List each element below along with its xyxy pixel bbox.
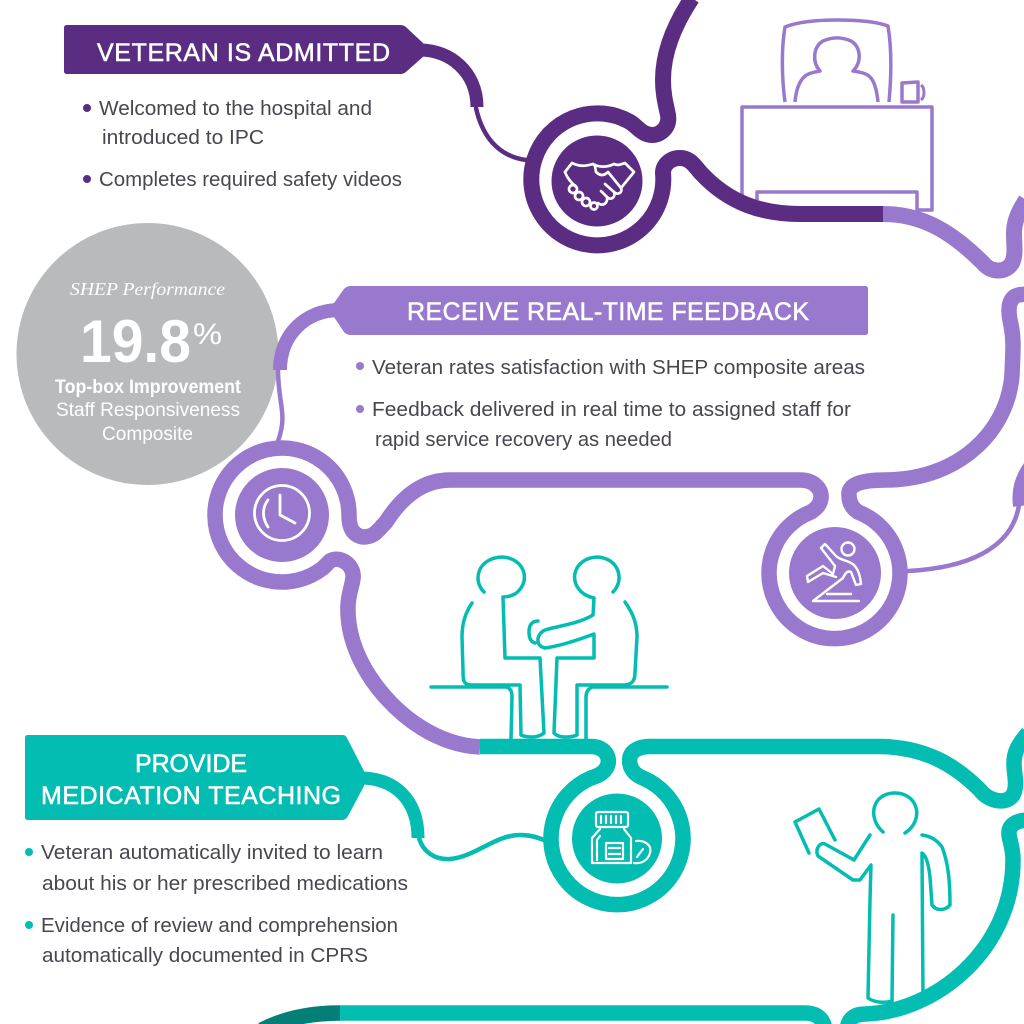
connector: thin line to medication ring [419,835,544,859]
text block: veteran admitted bullets: Welcomed to the hospital and [99,98,372,120]
icon: standing person with paper [795,793,950,1002]
connector: tail to right edge [1020,464,1024,506]
icon disk: handshake [552,136,642,226]
text block: veteran admitted bullets: introduced to IPC [102,127,264,149]
stat circle: SHEP performance: Composite [102,424,193,445]
text block: medication bullets: Evidence of review and comprehension [41,915,398,937]
stat circle: SHEP performance: SHEP Performance [70,279,225,299]
heading text: PROVIDE [135,750,247,778]
text block: feedback bullets: Veteran rates satisfaction with SHEP composite areas [372,357,865,379]
text block: medication bullets [25,842,408,967]
connector: thin line to clock ring [278,370,282,441]
text block: feedback bullets: rapid service recovery as needed [375,429,672,451]
icon: clock [254,486,310,540]
node: slip and fall ring [789,527,881,619]
stat circle: SHEP performance: Staff Responsiveness [56,400,240,421]
heading text: RECEIVE REAL-TIME FEEDBACK [407,298,809,326]
connector: bottom dark teal segment [262,1013,340,1024]
icon: person at desk [742,20,932,210]
stat circle: SHEP performance: % [193,318,222,351]
text block: veteran admitted bullets [83,98,402,191]
stat circle: SHEP performance [16,223,278,485]
connector: lower right teal path [847,820,1024,1024]
icon disk: clock [235,468,329,562]
heading tag: provide medication teaching [25,735,544,859]
icon: falling person [807,542,861,601]
stat circle: SHEP performance: 19.8 [80,308,191,375]
connector: middle path through clock and fall rings [215,294,1024,747]
text block: medication bullets: automatically documented in CPRS [42,945,368,967]
icon: medication bottle [592,812,650,863]
heading text: VETERAN IS ADMITTED [97,39,390,67]
icon disk: falling person [789,527,881,619]
connector: thin line from fall ring to right edge [908,464,1024,571]
connector: veteran admitted path (dark purple) [531,0,883,245]
icon: two people seated [431,557,667,739]
node: medication ring [572,794,662,884]
connector: teal path from purple junction through medication ring [480,733,1024,905]
text block: veteran admitted bullets: Completes required safety videos [99,169,402,191]
heading tag: receive real-time feedback [278,286,868,441]
icon disk: medication bottle [572,794,662,884]
text block: feedback bullets [356,357,865,451]
stat circle: SHEP performance: Top-box Improvement [55,377,242,398]
connector: upper light purple path [883,200,1024,271]
node: clock ring [235,468,329,562]
text block: medication bullets: Veteran automatically invited to learn [41,842,383,864]
connector: thin line to ring [476,108,526,160]
text block: feedback bullets: Feedback delivered in real time to assigned staff for [372,399,851,421]
heading tag: veteran is admitted [64,25,526,160]
text block: medication bullets: about his or her prescribed medications [42,873,408,895]
icon: handshake [565,163,634,210]
heading tag: provide medication teaching: MEDICATION TEACHING [41,782,341,810]
connector: bottom teal segment [340,1013,825,1024]
node: handshake ring [552,136,642,226]
